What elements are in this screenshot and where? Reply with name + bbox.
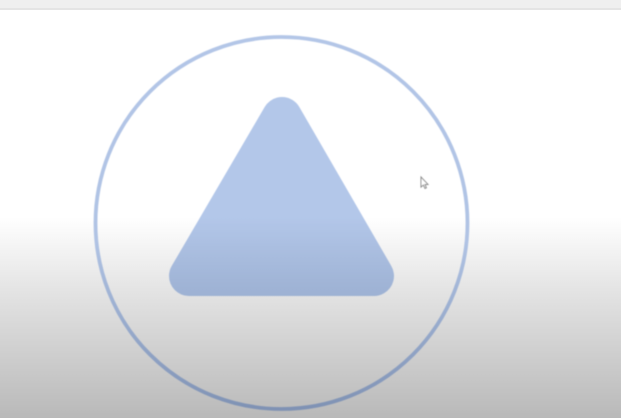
icon: mouse cursor (421, 177, 428, 188)
rounded triangle (189, 117, 374, 276)
top window bar (0, 0, 621, 10)
circle outline (96, 37, 468, 409)
